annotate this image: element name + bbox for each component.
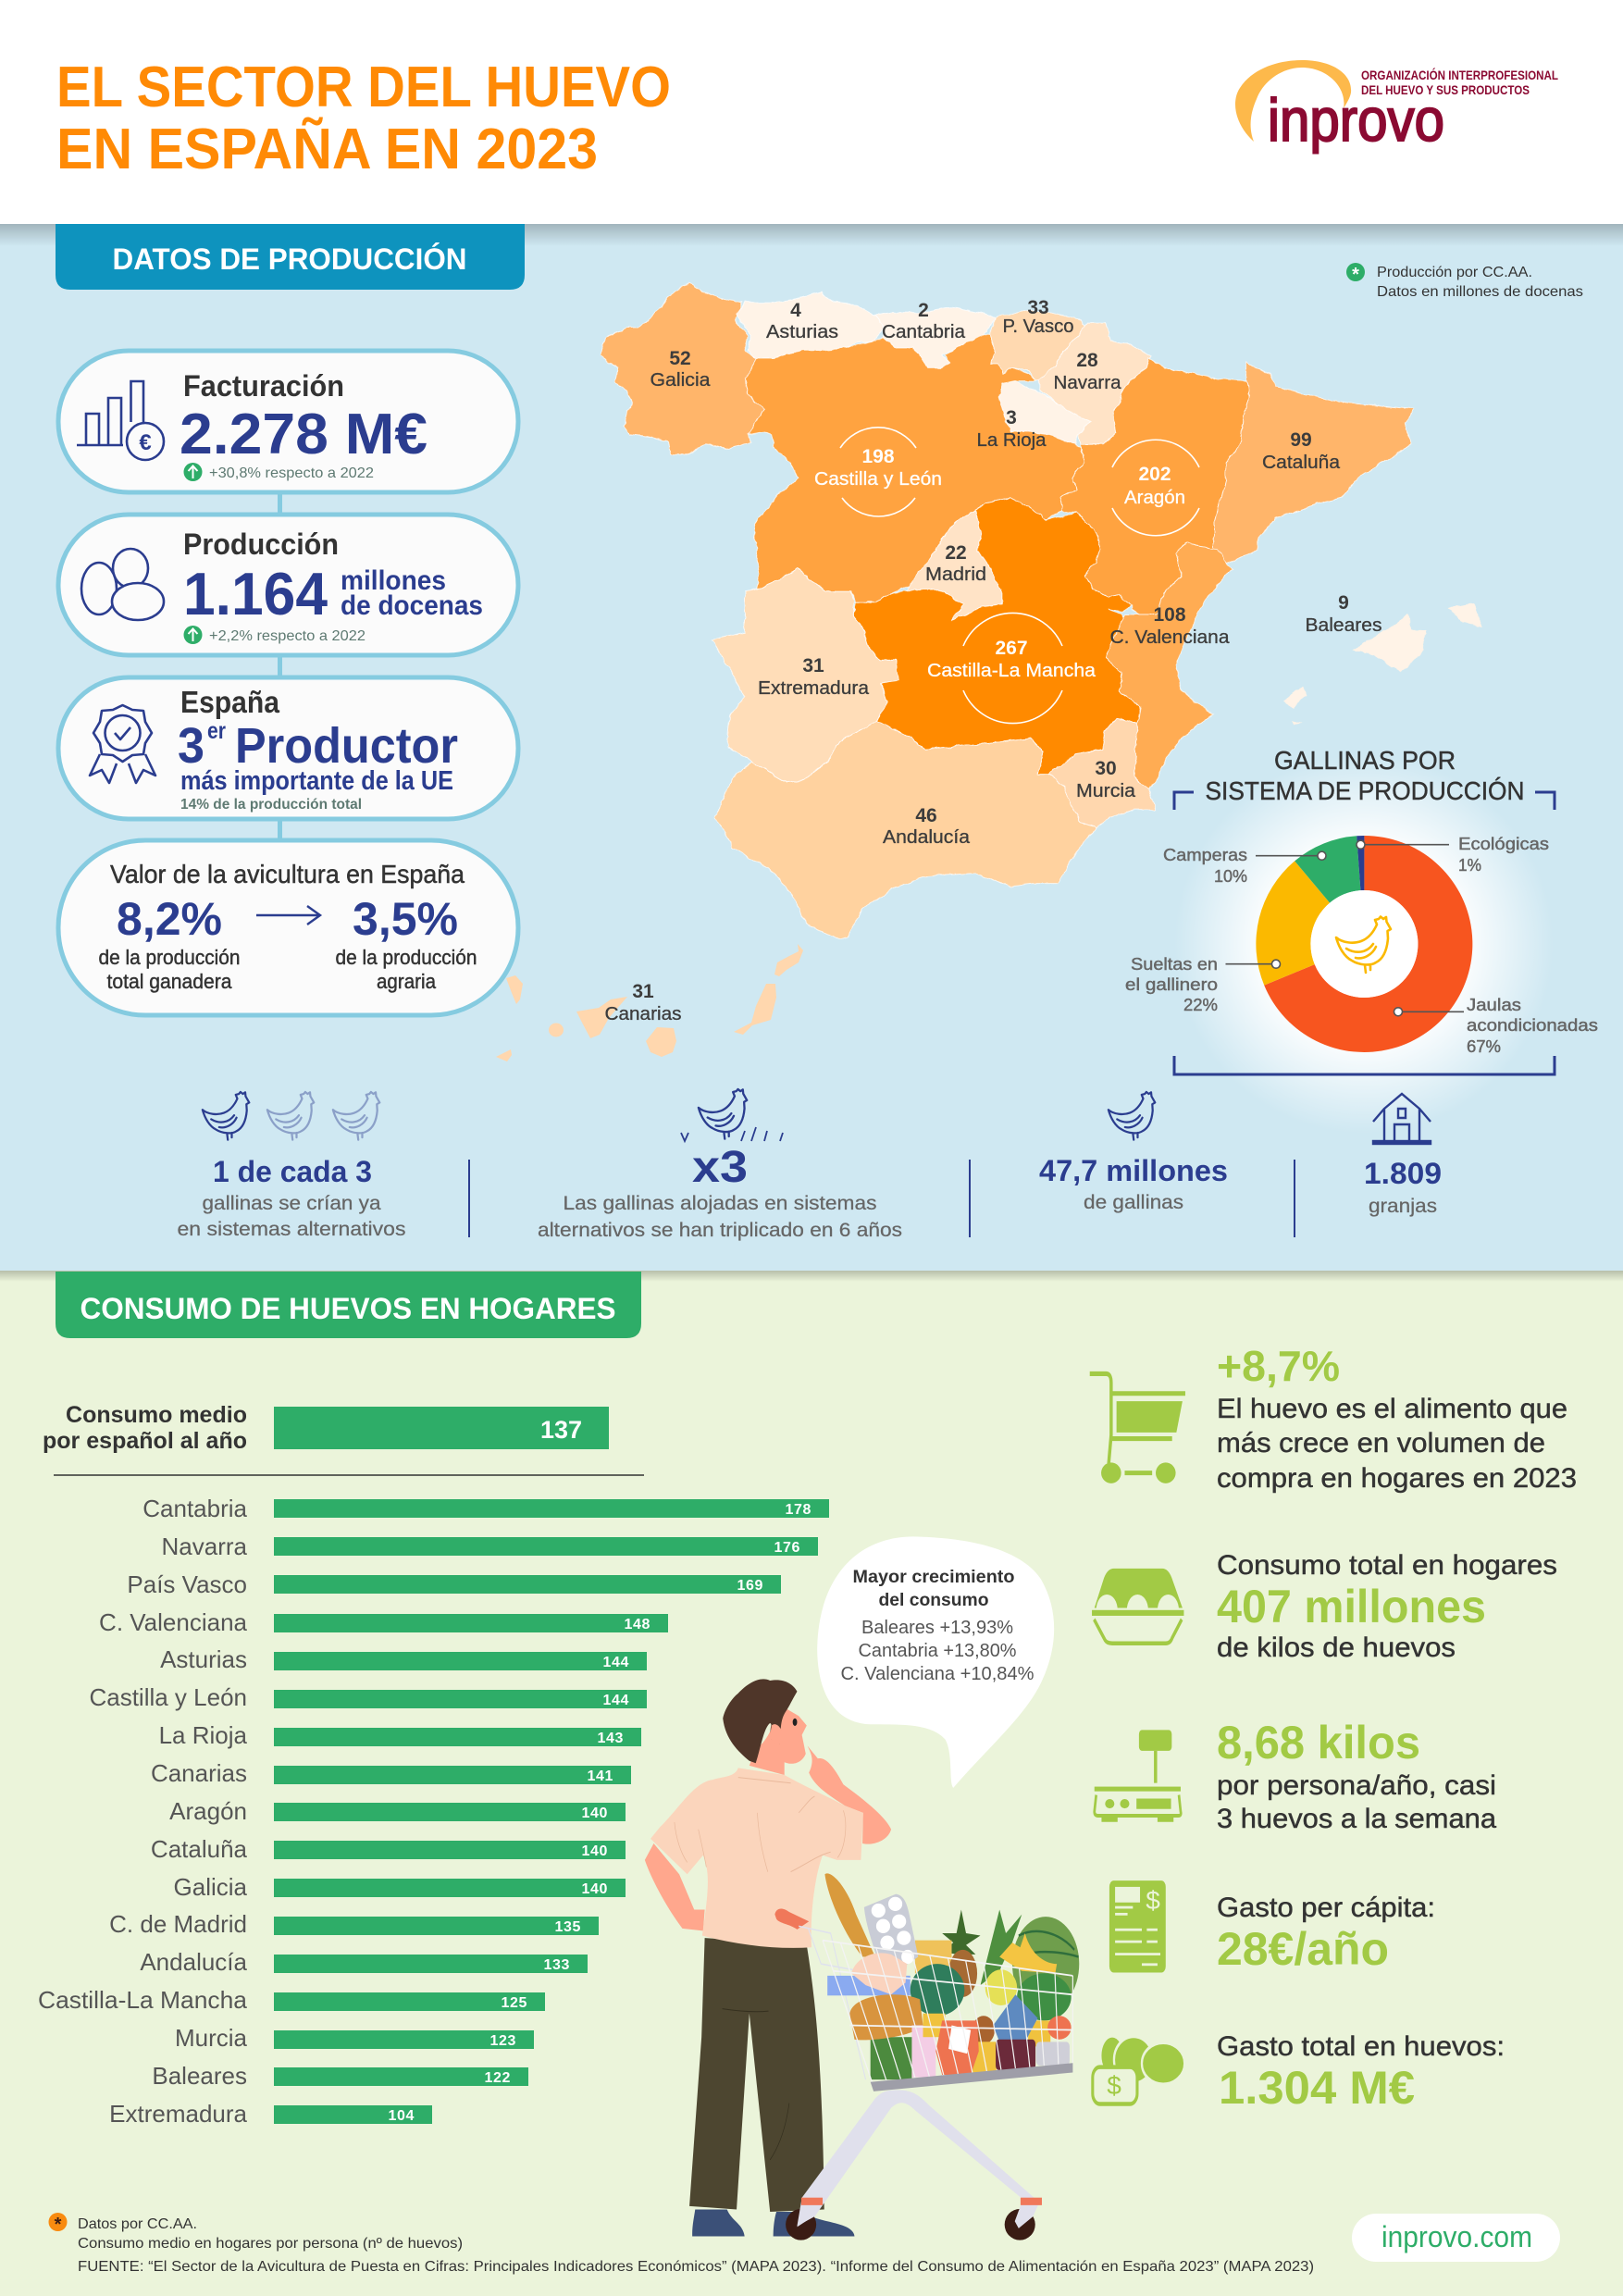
region: Castilla-La Mancha [854,498,1140,775]
stat: consumo total [1092,1550,1557,1663]
panel: España tercer productor [58,677,518,819]
bar: Murcia [175,2024,534,2052]
stat: 8,68 kilos: 8,68 kilos [1217,1717,1420,1769]
label: Galicia: Galicia [650,370,711,391]
bar: Galicia: Galicia [174,1873,248,1901]
panel: valor de la avicultura: 3,5% [353,893,458,945]
label: Andalucía: 46 [915,805,937,826]
icon: shopping cart [1090,1373,1185,1483]
panel: producción: 1.164 [183,560,328,627]
bar: Andalucía: 133 [544,1957,570,1973]
stat: 1.809 granjas: granjas [1369,1196,1437,1217]
panel: facturación: +30,8% respecto a 2022 [209,465,374,481]
bar: Castilla-La Mancha [38,1986,545,2014]
label: Extremadura: Extremadura [758,678,870,699]
bar: Navarra: Navarra [162,1533,248,1560]
background: production section [0,224,1623,1271]
label: La Rioja: La Rioja [977,430,1047,451]
label: Murcia: 30 [1095,758,1117,779]
leader lines [1225,840,1464,1016]
label: Madrid: 22 [945,542,967,564]
label: Madrid: Madrid [925,565,986,585]
speech bubble: mayor crecimiento: Baleares +13,93% [861,1618,1013,1638]
label: Murcia [1076,758,1136,801]
panel: producción: +2,2% respecto a 2022 [209,628,365,644]
bar: La Rioja: 143 [598,1731,624,1746]
heading tab: consumo de huevos en hogares [56,1272,641,1338]
panel: producción: millones [341,565,446,596]
segment: camperas [1295,836,1360,903]
logo: inprovo: ORGANIZACIÓN INTERPROFESIONAL [1361,67,1558,82]
label: sueltas [1125,955,1218,1014]
label: camperas [1163,846,1247,886]
label: camperas: Camperas [1163,846,1247,864]
stat: 8,68 kilos: 3 huevos a la semana [1217,1804,1496,1834]
region: Aragón [1060,358,1249,614]
stat: +8,7%: El huevo es el alimento que [1217,1394,1567,1424]
bar chart: consumo medio [38,1402,829,2128]
icon: scale [1095,1730,1181,1822]
label: Aragón [1124,464,1185,508]
label: P. Vasco [1003,297,1073,337]
label: Navarra [1053,350,1121,393]
label: Murcia: Murcia [1076,781,1136,801]
bar: Aragón: 140 [581,1806,608,1821]
bar: Murcia: Murcia [175,2024,248,2052]
label: Cantabria [882,300,966,342]
bar: Andalucía [140,1948,588,1976]
stat: consumo total: 407 millones [1217,1581,1486,1632]
map legend: Producción por CC.AA. [1377,265,1532,280]
stat: x3: Las gallinas alojadas en sistemas [563,1193,877,1214]
label: Baleares: Baleares [1305,615,1382,636]
label: ecológicas [1458,835,1549,875]
bar: Asturias: Asturias [160,1645,247,1673]
icon: medal [90,705,155,783]
bar: Canarias: 141 [587,1769,613,1784]
label: sueltas: Sueltas en [1131,955,1218,974]
website pill: inprovo.com [1381,2220,1532,2253]
footer notes: * [55,2215,62,2235]
icon: bar chart with euro [77,381,164,460]
label: P. Vasco: 33 [1027,297,1049,318]
stat: x3: x3 [692,1143,748,1192]
bar: Navarra: 176 [774,1540,800,1556]
region: Baleares [1282,604,1482,726]
panel: valor de la avicultura [58,840,518,1015]
stat: 1.809 granjas: 1.809 [1364,1157,1442,1190]
speech bubble: mayor crecimiento: Cantabria +13,80% [859,1641,1017,1661]
panel: España tercer productor: España [180,685,280,719]
bar: País Vasco: 169 [737,1578,763,1594]
icon: eggs and money: $ [1107,2071,1121,2100]
website pill [1352,2214,1560,2262]
stat: +8,7%: más crece en volumen de [1217,1428,1545,1458]
region: Cantabria [874,307,996,372]
panel: valor de la avicultura: agraria [377,970,437,993]
label: C. Valenciana: C. Valenciana [1110,627,1230,648]
panel: valor de la avicultura: Valor de la avicultura en España [110,860,465,888]
label: C. Valenciana: 108 [1153,604,1186,626]
region: Cataluña [1214,363,1415,564]
bar: Cantabria: 178 [785,1502,812,1518]
icon: barn [1373,1094,1431,1144]
bar: País Vasco [127,1570,781,1598]
panel: España tercer productor: er [207,718,226,744]
cart frame [786,1926,1042,2240]
icon: eggs and money [1093,2037,1184,2104]
segment: ecológicas [1357,836,1364,890]
bar: Castilla y León: Castilla y León [89,1683,247,1711]
national average row: por español al año [43,1428,247,1454]
bar: Cataluña: 140 [581,1843,608,1859]
label: La Rioja: 3 [1006,407,1017,428]
icon: receipt [1109,1880,1166,1973]
bar: C. Valenciana: 148 [624,1617,650,1632]
panel: valor de la avicultura: de la producción [335,946,477,969]
donut chart: gallinas por sistema de producción [1125,746,1598,1134]
bar: Andalucía: Andalucía [140,1948,248,1976]
stat: x3 [538,1089,902,1241]
national average row: Consumo medio [66,1402,247,1428]
region: Madrid [904,511,1001,621]
label: Castilla-La Mancha: 267 [995,638,1028,659]
label: La Rioja [977,407,1047,451]
region: Andalucía [715,721,1096,939]
title: EN ESPAÑA EN 2023 [56,118,598,181]
bar: La Rioja [159,1721,641,1749]
stat: +8,7%: +8,7% [1217,1342,1340,1390]
stat: 47,7 millones: de gallinas [1084,1192,1183,1213]
stat: 8,68 kilos: por persona/año, casi [1217,1770,1496,1801]
arrow [256,906,320,925]
label: Asturias: Asturias [766,322,838,342]
footer notes: FUENTE: “El Sector de la Avicultura de Puesta en Cifras: Principales Indicadores Económicos” (MAPA 2023). “Informe del Consumo de Alimentación en España 2023” (MAPA 2023) [78,2259,1314,2275]
panel: España tercer productor: 14% de la producción total [180,797,362,813]
bar: C. de Madrid: 135 [555,1919,581,1935]
bar: Aragón: Aragón [169,1797,247,1825]
label: Extremadura: 31 [802,655,824,676]
map labels [605,297,1382,1024]
bar: Cataluña: Cataluña [151,1835,248,1863]
heading tab: datos de producción [56,224,525,290]
segment: jaulas acondicionadas [1264,836,1472,1052]
region: C. Valenciana [1105,543,1232,789]
heading tab: consumo de huevos en hogares: CONSUMO DE HUEVOS EN HOGARES [80,1292,616,1325]
stat: gasto total: 1.304 M€ [1219,2062,1415,2114]
label: Aragón: Aragón [1124,488,1185,508]
panel: producción: Producción [183,527,339,561]
panel: facturación: 2.278 M€ [180,403,427,466]
bar: Baleares: Baleares [152,2062,247,2090]
donut chart: gallinas por sistema de producción: GALLINAS POR [1274,746,1456,775]
bar: Canarias [151,1759,631,1787]
label: Cataluña: Cataluña [1262,453,1341,473]
region: País Vasco [990,310,1087,381]
stat: 1 de cada 3: en sistemas alternativos [178,1219,405,1240]
stat: 47,7 millones [1039,1092,1228,1213]
panel: producción [58,515,518,655]
bar: Castilla-La Mancha: 125 [502,1995,527,2011]
stat: 8,68 kilos [1095,1717,1496,1834]
stat: 1 de cada 3: gallinas se crían ya [202,1193,381,1214]
bar: Galicia [174,1873,626,1901]
speech bubble: mayor crecimiento: Mayor crecimiento [853,1568,1014,1587]
label: Extremadura [758,655,870,699]
logo: inprovo: DEL HUEVO Y SUS PRODUCTOS [1361,82,1530,97]
panel: España tercer productor: más importante de la UE [180,766,453,796]
stat: 1.809 granjas [1364,1094,1442,1217]
logo: inprovo [1235,60,1558,154]
label: Galicia [650,348,711,391]
bar: La Rioja: La Rioja [159,1721,248,1749]
label: Andalucía: Andalucía [883,827,971,848]
person [645,1679,891,2237]
label: Canarias [605,981,681,1024]
segment: sueltas en el gallinero [1256,861,1330,986]
label: jaulas: Jaulas [1467,996,1521,1014]
bar: Baleares [152,2062,528,2090]
national average row [43,1402,609,1454]
label: Madrid [925,542,986,585]
panel: España tercer productor: 3 [178,718,204,774]
label: sueltas: el gallinero [1125,975,1218,994]
label: Aragón: 202 [1138,464,1171,485]
title: EL SECTOR DEL HUEVO [56,56,671,119]
label: Baleares [1305,592,1382,636]
label: Cantabria: Cantabria [882,322,966,342]
label: Cataluña: 99 [1290,429,1312,451]
stat: gasto total [1093,2031,1505,2114]
bar: C. de Madrid [109,1910,599,1938]
icon: hen in donut [1336,916,1391,973]
region: Navarra [1040,323,1152,444]
label: C. Valenciana [1110,604,1230,648]
bar: Extremadura [109,2100,432,2128]
stat: 47,7 millones: 47,7 millones [1039,1154,1228,1187]
region: Murcia [1048,718,1155,827]
region: Castilla y León [745,335,1084,602]
region: Galicia [601,282,763,454]
panel: valor de la avicultura: 8,2% [117,893,222,945]
label: Castilla y León: 198 [861,446,895,467]
label: ecológicas: 1% [1458,856,1481,875]
illustration: man with shopping cart [645,1679,1079,2240]
panel: producción: de docenas [341,590,483,621]
bar: Castilla-La Mancha: Castilla-La Mancha [38,1986,248,2014]
footer notes: Consumo medio en hogares por persona (nº de huevos) [78,2236,463,2252]
national average row: 137 [540,1416,582,1444]
donut chart: gallinas por sistema de producción: SISTEMA DE PRODUCCIÓN [1205,776,1525,805]
map legend: * [1352,265,1359,285]
label: Asturias [766,300,838,342]
stat: consumo total: Consumo total en hogares [1217,1550,1557,1581]
stat: gasto per cápita: 28€/año [1217,1923,1389,1975]
label: jaulas [1467,996,1598,1056]
map legend [1346,263,1583,300]
footer notes: Datos por CC.AA. [78,2216,197,2232]
label: Cantabria: 2 [918,300,929,321]
label: jaulas: acondicionadas [1467,1016,1598,1035]
map legend: Datos en millones de docenas [1377,284,1583,300]
bar: Canarias: Canarias [151,1759,247,1787]
panel: facturación: Facturación [183,369,344,403]
stat: consumo total: de kilos de huevos [1217,1632,1456,1663]
bar: Castilla y León: 144 [603,1693,629,1708]
title [56,56,671,181]
stat: +8,7% [1090,1342,1577,1494]
label: jaulas: 67% [1467,1037,1501,1056]
label: Cataluña [1262,429,1341,473]
label: Castilla y León: Castilla y León [814,469,942,490]
stat: +8,7%: compra en hogares en 2023 [1217,1463,1577,1494]
bar: País Vasco: País Vasco [127,1570,247,1598]
label: ecológicas: Ecológicas [1458,835,1549,853]
map of Spain [601,282,1482,939]
label: Navarra: Navarra [1053,373,1121,393]
bar: C. Valenciana [99,1608,668,1636]
bar: Baleares: 122 [485,2070,511,2086]
icon: bar chart with euro: € [139,430,152,455]
label: P. Vasco: P. Vasco [1003,316,1073,337]
bar: Cantabria [142,1495,829,1522]
background: header [0,0,1623,224]
bar: Asturias: 144 [603,1655,629,1670]
bar: Extremadura: 104 [389,2108,415,2124]
icon: arrow up [183,626,202,644]
label: Asturias: 4 [790,300,801,321]
bar: Galicia: 140 [581,1881,608,1897]
bar: Cataluña [151,1835,626,1863]
stat: gasto total: Gasto total en huevos: [1217,2031,1505,2062]
bar: C. de Madrid: C. de Madrid [109,1910,247,1938]
region: Extremadura [712,569,898,782]
stat: 1 de cada 3: 1 de cada 3 [213,1155,372,1188]
stat: gasto per cápita: Gasto per cápita: [1217,1893,1435,1923]
label: Navarra: 28 [1076,350,1098,371]
footer notes [48,2213,1314,2275]
panel: facturación [58,351,518,492]
bar: C. Valenciana: C. Valenciana [99,1608,248,1636]
icon: arrow up [183,463,202,481]
cart groceries [824,1873,1079,2079]
stat: x3: alternativos se han triplicado en 6 años [538,1220,902,1241]
heading tab: datos de producción: DATOS DE PRODUCCIÓN [113,242,466,276]
region: Canarias [496,944,803,1061]
bar: Cantabria: Cantabria [142,1495,248,1522]
bar: Aragón [169,1797,626,1825]
label: sueltas: 22% [1183,996,1218,1014]
connectors between pills [278,490,282,842]
bar: Navarra [162,1533,818,1560]
stat: 1 de cada 3 [178,1092,405,1240]
speech bubble: mayor crecimiento: C. Valenciana +10,84% [840,1664,1035,1684]
icon: eggs [81,549,164,620]
cart basket [823,1941,1072,2091]
region: La Rioja [998,381,1090,444]
icon: receipt: $ [1146,1886,1160,1915]
icon: egg carton [1092,1569,1183,1644]
speech bubble: mayor crecimiento: del consumo [879,1591,988,1610]
background: consumption section [0,1271,1623,2296]
label: Castilla y León [814,446,942,490]
label: Castilla-La Mancha [927,638,1096,681]
label: Canarias: Canarias [605,1004,681,1024]
region: Asturias [736,292,884,358]
label: Canarias: 31 [632,981,654,1002]
bar: Castilla y León [89,1683,647,1711]
panel: España tercer productor: Productor [235,718,458,774]
panel: valor de la avicultura: de la producción [98,946,241,969]
label: Andalucía [883,805,971,848]
label: Castilla-La Mancha: Castilla-La Mancha [927,661,1096,681]
label: camperas: 10% [1214,867,1247,886]
logo: inprovo: inprovo [1268,86,1444,154]
label: Galicia: 52 [669,348,691,369]
panel: valor de la avicultura: total ganadera [107,970,232,993]
label: Baleares: 9 [1338,592,1349,614]
bar: Extremadura: Extremadura [109,2100,248,2128]
bar: Asturias [160,1645,647,1673]
bar: Murcia: 123 [490,2033,516,2049]
stat: gasto per cápita [1109,1880,1435,1975]
speech bubble: mayor crecimiento [817,1536,1054,1788]
